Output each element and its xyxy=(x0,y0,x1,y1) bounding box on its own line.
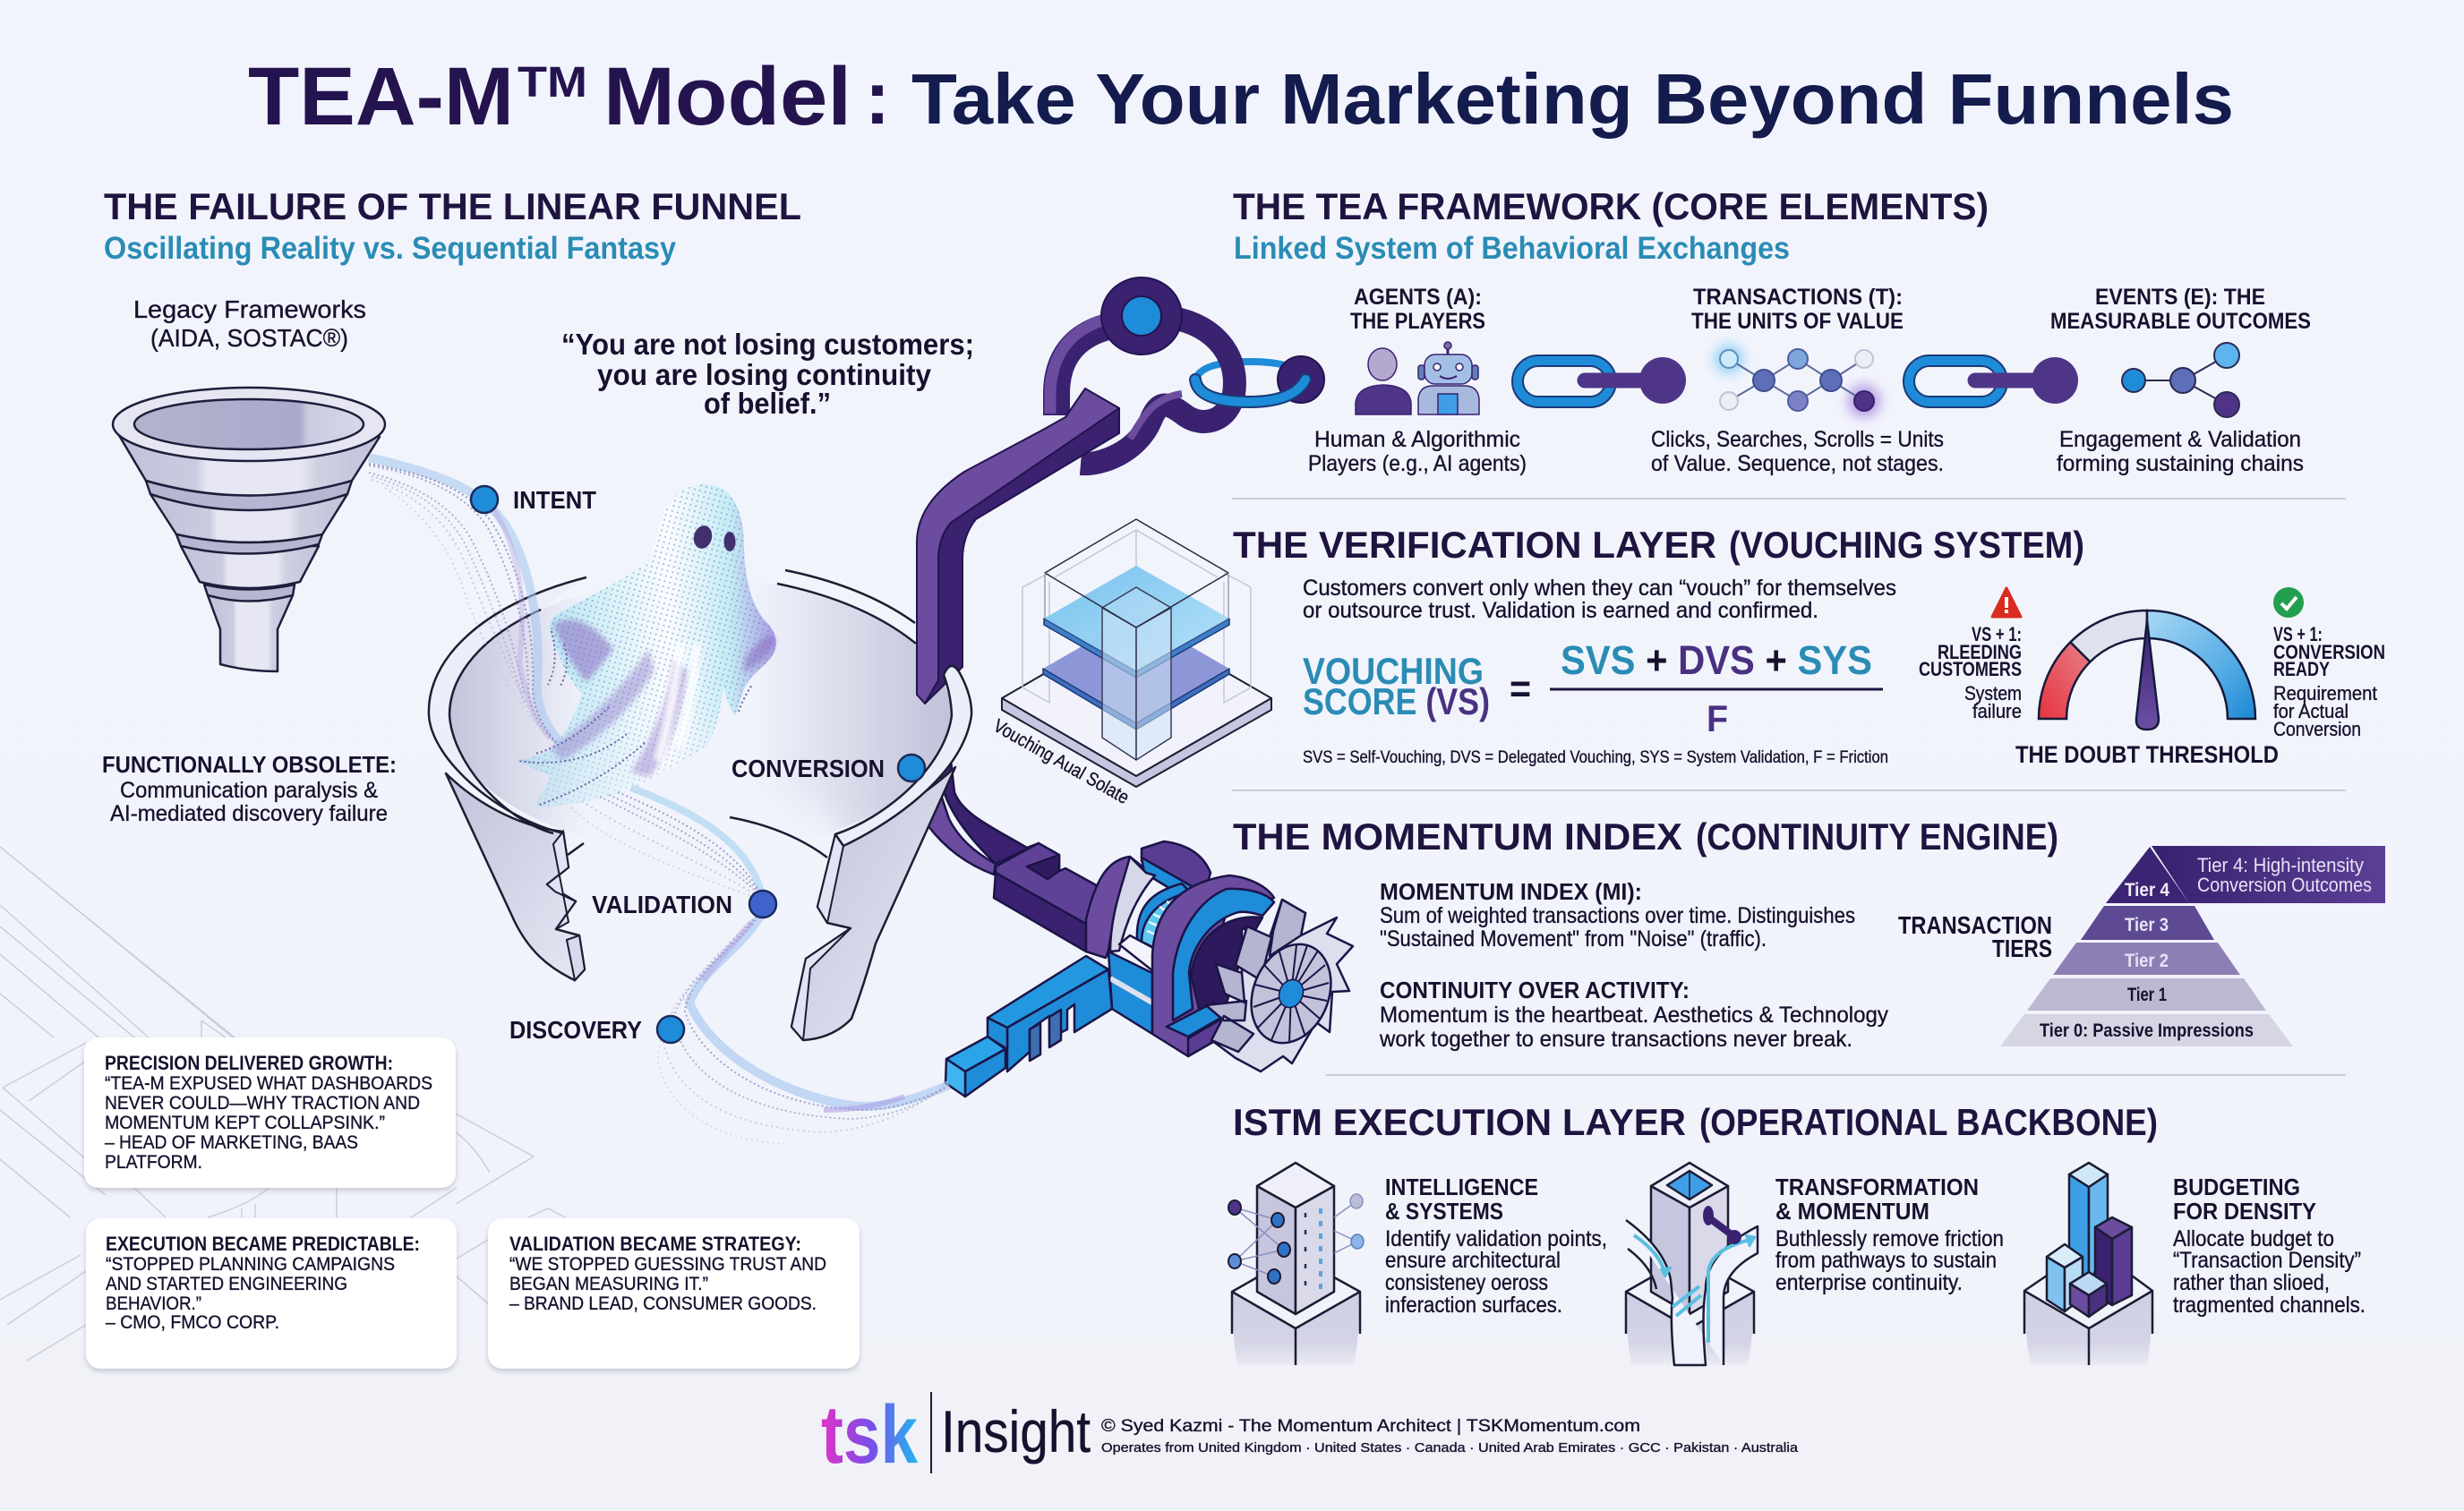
column: events: Engagement & Validation xyxy=(2059,427,2301,452)
illustration: dotted ghost xyxy=(518,484,776,807)
panel: TEA framework heading xyxy=(1233,185,1989,266)
gauge: the doubt threshold xyxy=(1919,587,2385,768)
text: functionally obsolete: FUNCTIONALLY OBSOLETE: xyxy=(102,751,397,778)
column: transactions: Clicks, Searches, Scrolls = Units xyxy=(1651,427,1944,452)
card: execution became predictable xyxy=(86,1218,457,1369)
heading: ISTM execution layer: ISTM EXECUTION LAYER xyxy=(1233,1101,1686,1143)
icon: budgeting tower xyxy=(2024,1163,2152,1365)
text: transformation and momentum: Buthlessly remove friction xyxy=(1775,1226,2004,1251)
icon: check xyxy=(2273,587,2304,618)
panel: TEA framework heading: THE TEA FRAMEWORK (CORE ELEMENTS) xyxy=(1233,185,1989,227)
illustration: broken funnel xyxy=(429,570,955,1040)
label: transaction tiers: TIERS xyxy=(1992,935,2052,962)
card: precision delivered growth: “TEA-M EXPUSED WHAT DASHBOARDS xyxy=(105,1073,432,1094)
card: precision delivered growth: NEVER COULD—WHY TRACTION AND xyxy=(105,1093,420,1114)
panel: failure of the linear funnel heading: Oscillating Reality vs. Sequential Fantasy xyxy=(104,231,676,266)
text: budgeting for density: rather than slioed, xyxy=(2173,1270,2330,1295)
text: intelligence and systems: consisteney oeross xyxy=(1385,1270,1548,1295)
text: legacy frameworks: Legacy Frameworks xyxy=(133,295,366,323)
card: validation became strategy xyxy=(488,1218,860,1369)
column: transactions: THE UNITS OF VALUE xyxy=(1691,309,1904,334)
illustration: turbine engine and lower pipe xyxy=(928,761,1274,1097)
column: transactions: of Value. Sequence, not stages. xyxy=(1651,451,1944,476)
card: precision delivered growth: MOMENTUM KEPT COLLAPSINK.” xyxy=(105,1113,385,1133)
panel: TEA framework heading: Linked System of Behavioral Exchanges xyxy=(1234,231,1790,266)
gauge: the doubt threshold: VS + 1: xyxy=(1972,623,2022,645)
label: vouching plate: Vouching Aual Solate xyxy=(990,715,1133,808)
text: momentum index description xyxy=(1380,878,1855,952)
text: verification description: Customers convert only when they can “vouch” for themselves xyxy=(1303,576,1896,601)
node: conversion: CONVERSION xyxy=(732,755,885,782)
chart: tier pyramid: Tier 4 xyxy=(2125,880,2169,901)
chart: tier pyramid: Tier 4: High-intensity xyxy=(2197,854,2364,876)
gauge: the doubt threshold: for Actual xyxy=(2273,700,2348,722)
text: budgeting for density: FOR DENSITY xyxy=(2173,1198,2316,1225)
heading: verification layer: THE VERIFICATION LAYER xyxy=(1233,524,1716,566)
text: momentum index description: "Sustained Movement" from "Noise" (traffic). xyxy=(1380,926,1767,952)
text: intelligence and systems: inferaction surfaces. xyxy=(1385,1293,1562,1318)
text: intelligence and systems: ensure architectural xyxy=(1385,1248,1561,1273)
formula: vouching score: = xyxy=(1510,667,1531,711)
gauge: the doubt threshold: Requirement xyxy=(2273,682,2377,704)
card: validation became strategy: VALIDATION BECAME STRATEGY: xyxy=(509,1233,801,1255)
text: intelligence and systems: Identify validation points, xyxy=(1385,1226,1607,1251)
text: budgeting for density: tragmented channels. xyxy=(2173,1293,2366,1318)
heading: verification layer: (VOUCHING SYSTEM) xyxy=(1729,524,2084,566)
text: transformation and momentum xyxy=(1775,1174,2004,1295)
chart: tier pyramid: Conversion Outcomes xyxy=(2197,874,2372,896)
text: continuity over activity xyxy=(1379,977,1888,1052)
gauge: the doubt threshold: THE DOUBT THRESHOLD xyxy=(2015,741,2279,768)
text: transformation and momentum: from pathways to sustain xyxy=(1775,1248,1997,1273)
formula: vouching score: SCORE (VS) xyxy=(1303,680,1490,722)
text: budgeting for density: “Transaction Density” xyxy=(2173,1248,2361,1273)
gauge: the doubt threshold: READY xyxy=(2273,658,2330,680)
icon: legacy funnel xyxy=(113,388,385,671)
formula: vouching score: VOUCHING xyxy=(1303,650,1484,692)
chart: tier pyramid: Tier 1 xyxy=(2127,985,2167,1005)
gauge: the doubt threshold: CUSTOMERS xyxy=(1919,658,2022,680)
icon: warning triangle xyxy=(1992,588,2021,617)
text: intelligence and systems: & SYSTEMS xyxy=(1385,1198,1503,1225)
formula: vouching score: SVS + DVS + SYS xyxy=(1561,637,1872,683)
text: continuity over activity: Momentum is the heartbeat. Aesthetics & Technology xyxy=(1380,1003,1888,1028)
icon: human and robot xyxy=(1356,342,1479,414)
column: agents: THE PLAYERS xyxy=(1350,309,1485,334)
gauge arc xyxy=(2039,610,2255,730)
heading: ISTM execution layer: (OPERATIONAL BACKBONE) xyxy=(1699,1101,2158,1143)
illustration: upper purple pipe and chain xyxy=(835,277,1324,846)
icon: chain link two xyxy=(1909,357,2078,404)
text: budgeting for density: Allocate budget to xyxy=(2173,1226,2334,1251)
heading: momentum index: THE MOMENTUM INDEX xyxy=(1233,815,1682,858)
formula: vouching score: SVS = Self-Vouching, DVS = Delegated Vouching, SYS = System Validation, F = Friction xyxy=(1303,748,1888,767)
column: events: forming sustaining chains xyxy=(2057,451,2304,476)
column: agents: AGENTS (A): xyxy=(1354,285,1482,310)
title: TM xyxy=(518,59,587,107)
column: transactions xyxy=(1651,285,1944,476)
label: transaction tiers xyxy=(1898,911,2052,962)
quote: “You are not losing customers; xyxy=(561,328,974,361)
column: agents xyxy=(1308,285,1527,476)
card: precision delivered growth: – HEAD OF MARKETING, BAAS xyxy=(105,1132,358,1153)
text: budgeting for density xyxy=(2173,1174,2366,1318)
quote xyxy=(561,328,974,420)
card: validation became strategy: “WE STOPPED GUESSING TRUST AND xyxy=(509,1254,826,1275)
gauge: the doubt threshold: RLEEDING xyxy=(1938,641,2022,663)
gauge: the doubt threshold: Conversion xyxy=(2273,718,2361,740)
text: functionally obsolete: AI-mediated discovery failure xyxy=(110,801,388,826)
text: verification description xyxy=(1303,576,1896,623)
chart: tier pyramid: Tier 3 xyxy=(2125,915,2169,935)
card: execution became predictable: “STOPPED PLANNING CAMPAIGNS xyxy=(106,1254,395,1275)
column: agents: Players (e.g., AI agents) xyxy=(1308,451,1527,476)
text: legacy frameworks xyxy=(133,295,366,352)
formula: vouching score: F xyxy=(1707,697,1728,739)
card: execution became predictable: – CMO, FMCO CORP. xyxy=(106,1312,279,1333)
card: precision delivered growth xyxy=(84,1037,456,1188)
heading: momentum index xyxy=(1233,815,2058,858)
label: transaction tiers: TRANSACTION xyxy=(1898,911,2052,939)
chart: tier pyramid xyxy=(2000,846,2385,1046)
column: transactions: TRANSACTIONS (T): xyxy=(1693,285,1903,310)
illustration: vouching glass cube xyxy=(1002,519,1271,787)
text: transformation and momentum: TRANSFORMATION xyxy=(1775,1174,1979,1200)
card: precision delivered growth: PLATFORM. xyxy=(105,1152,202,1173)
text: transformation and momentum: enterprise continuity. xyxy=(1775,1270,1963,1295)
heading: momentum index: (CONTINUITY ENGINE) xyxy=(1696,815,2058,858)
text: intelligence and systems xyxy=(1385,1174,1607,1318)
text: verification description: or outsource trust. Validation is earned and confirmed. xyxy=(1303,598,1818,623)
gauge: the doubt threshold: System xyxy=(1964,682,2022,704)
labels: journey nodes xyxy=(471,486,925,1044)
card: precision delivered growth: PRECISION DELIVERED GROWTH: xyxy=(105,1052,393,1074)
gauge: the doubt threshold: VS + 1: xyxy=(2273,623,2323,645)
gauge: the doubt threshold: CONVERSION xyxy=(2273,641,2385,663)
node: intent: INTENT xyxy=(513,486,596,514)
text: momentum index description: Sum of weighted transactions over time. Distinguishes xyxy=(1380,903,1855,928)
heading: verification layer xyxy=(1233,524,2084,566)
icon: intelligence tower xyxy=(1228,1163,1364,1365)
text: transformation and momentum: & MOMENTUM xyxy=(1775,1198,1929,1225)
icon: event graph xyxy=(2122,343,2239,417)
panel: failure of the linear funnel heading: THE FAILURE OF THE LINEAR FUNNEL xyxy=(104,185,801,227)
quote: of belief.” xyxy=(704,387,831,420)
text: continuity over activity: CONTINUITY OVER ACTIVITY: xyxy=(1380,977,1690,1003)
text: continuity over activity: work together to ensure transactions never break. xyxy=(1379,1027,1852,1052)
chart: tier pyramid: Tier 0: Passive Impressions xyxy=(2040,1020,2254,1041)
icon: transaction network xyxy=(1715,345,1880,417)
card: validation became strategy: BEGAN MEASURING IT.” xyxy=(509,1274,708,1294)
title: Take Your Marketing Beyond Funnels xyxy=(911,59,2234,139)
illustration: turbine wheel xyxy=(1206,900,1353,1071)
text: budgeting for density: BUDGETING xyxy=(2173,1174,2300,1200)
credits: © Syed Kazmi - The Momentum Architect | TSKMomentum.com xyxy=(1101,1417,1640,1436)
column: events: EVENTS (E): THE xyxy=(2095,285,2265,310)
column: agents: Human & Algorithmic xyxy=(1314,427,1520,452)
node: intent xyxy=(471,486,596,514)
text: legacy frameworks: (AIDA, SOSTAC®) xyxy=(150,324,348,352)
card: execution became predictable: BEHAVIOR.” xyxy=(106,1293,201,1314)
text: functionally obsolete: Communication paralysis & xyxy=(120,778,378,803)
formula: vouching score xyxy=(1303,637,1888,767)
gauge: the doubt threshold: failure xyxy=(1972,700,2022,722)
locations: Operates from United Kingdom · United States · Canada · United Arab Emirates · GCC · Pakistan · Australia xyxy=(1101,1440,1799,1456)
quote: you are losing continuity xyxy=(597,358,932,391)
title: : xyxy=(865,55,890,140)
card: execution became predictable: AND STARTED ENGINEERING xyxy=(106,1274,347,1294)
node: validation: VALIDATION xyxy=(592,891,732,918)
title: TEA-M xyxy=(248,51,514,142)
footer: logo and credits xyxy=(821,1389,1799,1481)
particle flow: funnel to intent to ghost xyxy=(369,457,560,743)
logo: tsk: tsk xyxy=(821,1389,919,1481)
text: intelligence and systems: INTELLIGENCE xyxy=(1385,1174,1538,1200)
title xyxy=(248,51,2234,142)
icon: chain link one xyxy=(1518,357,1686,404)
panel: failure of the linear funnel heading xyxy=(104,185,801,266)
title: Model xyxy=(603,51,851,142)
particle flow: ghost to validation xyxy=(571,788,763,900)
logo: insight: Insight xyxy=(941,1398,1091,1464)
card: validation became strategy: – BRAND LEAD, CONSUMER GOODS. xyxy=(509,1293,817,1314)
chart: tier pyramid: Tier 2 xyxy=(2125,951,2169,971)
column: events: MEASURABLE OUTCOMES xyxy=(2050,309,2311,334)
text: functionally obsolete xyxy=(102,751,397,826)
column: events xyxy=(2050,285,2311,476)
card: execution became predictable: EXECUTION BECAME PREDICTABLE: xyxy=(106,1233,420,1255)
heading: ISTM execution layer xyxy=(1233,1101,2158,1143)
particle flow: validation to discovery to gear xyxy=(658,911,949,1144)
icon: transformation tower xyxy=(1626,1163,1758,1365)
node: discovery: DISCOVERY xyxy=(509,1016,642,1044)
text: momentum index description: MOMENTUM INDEX (MI): xyxy=(1380,878,1642,905)
